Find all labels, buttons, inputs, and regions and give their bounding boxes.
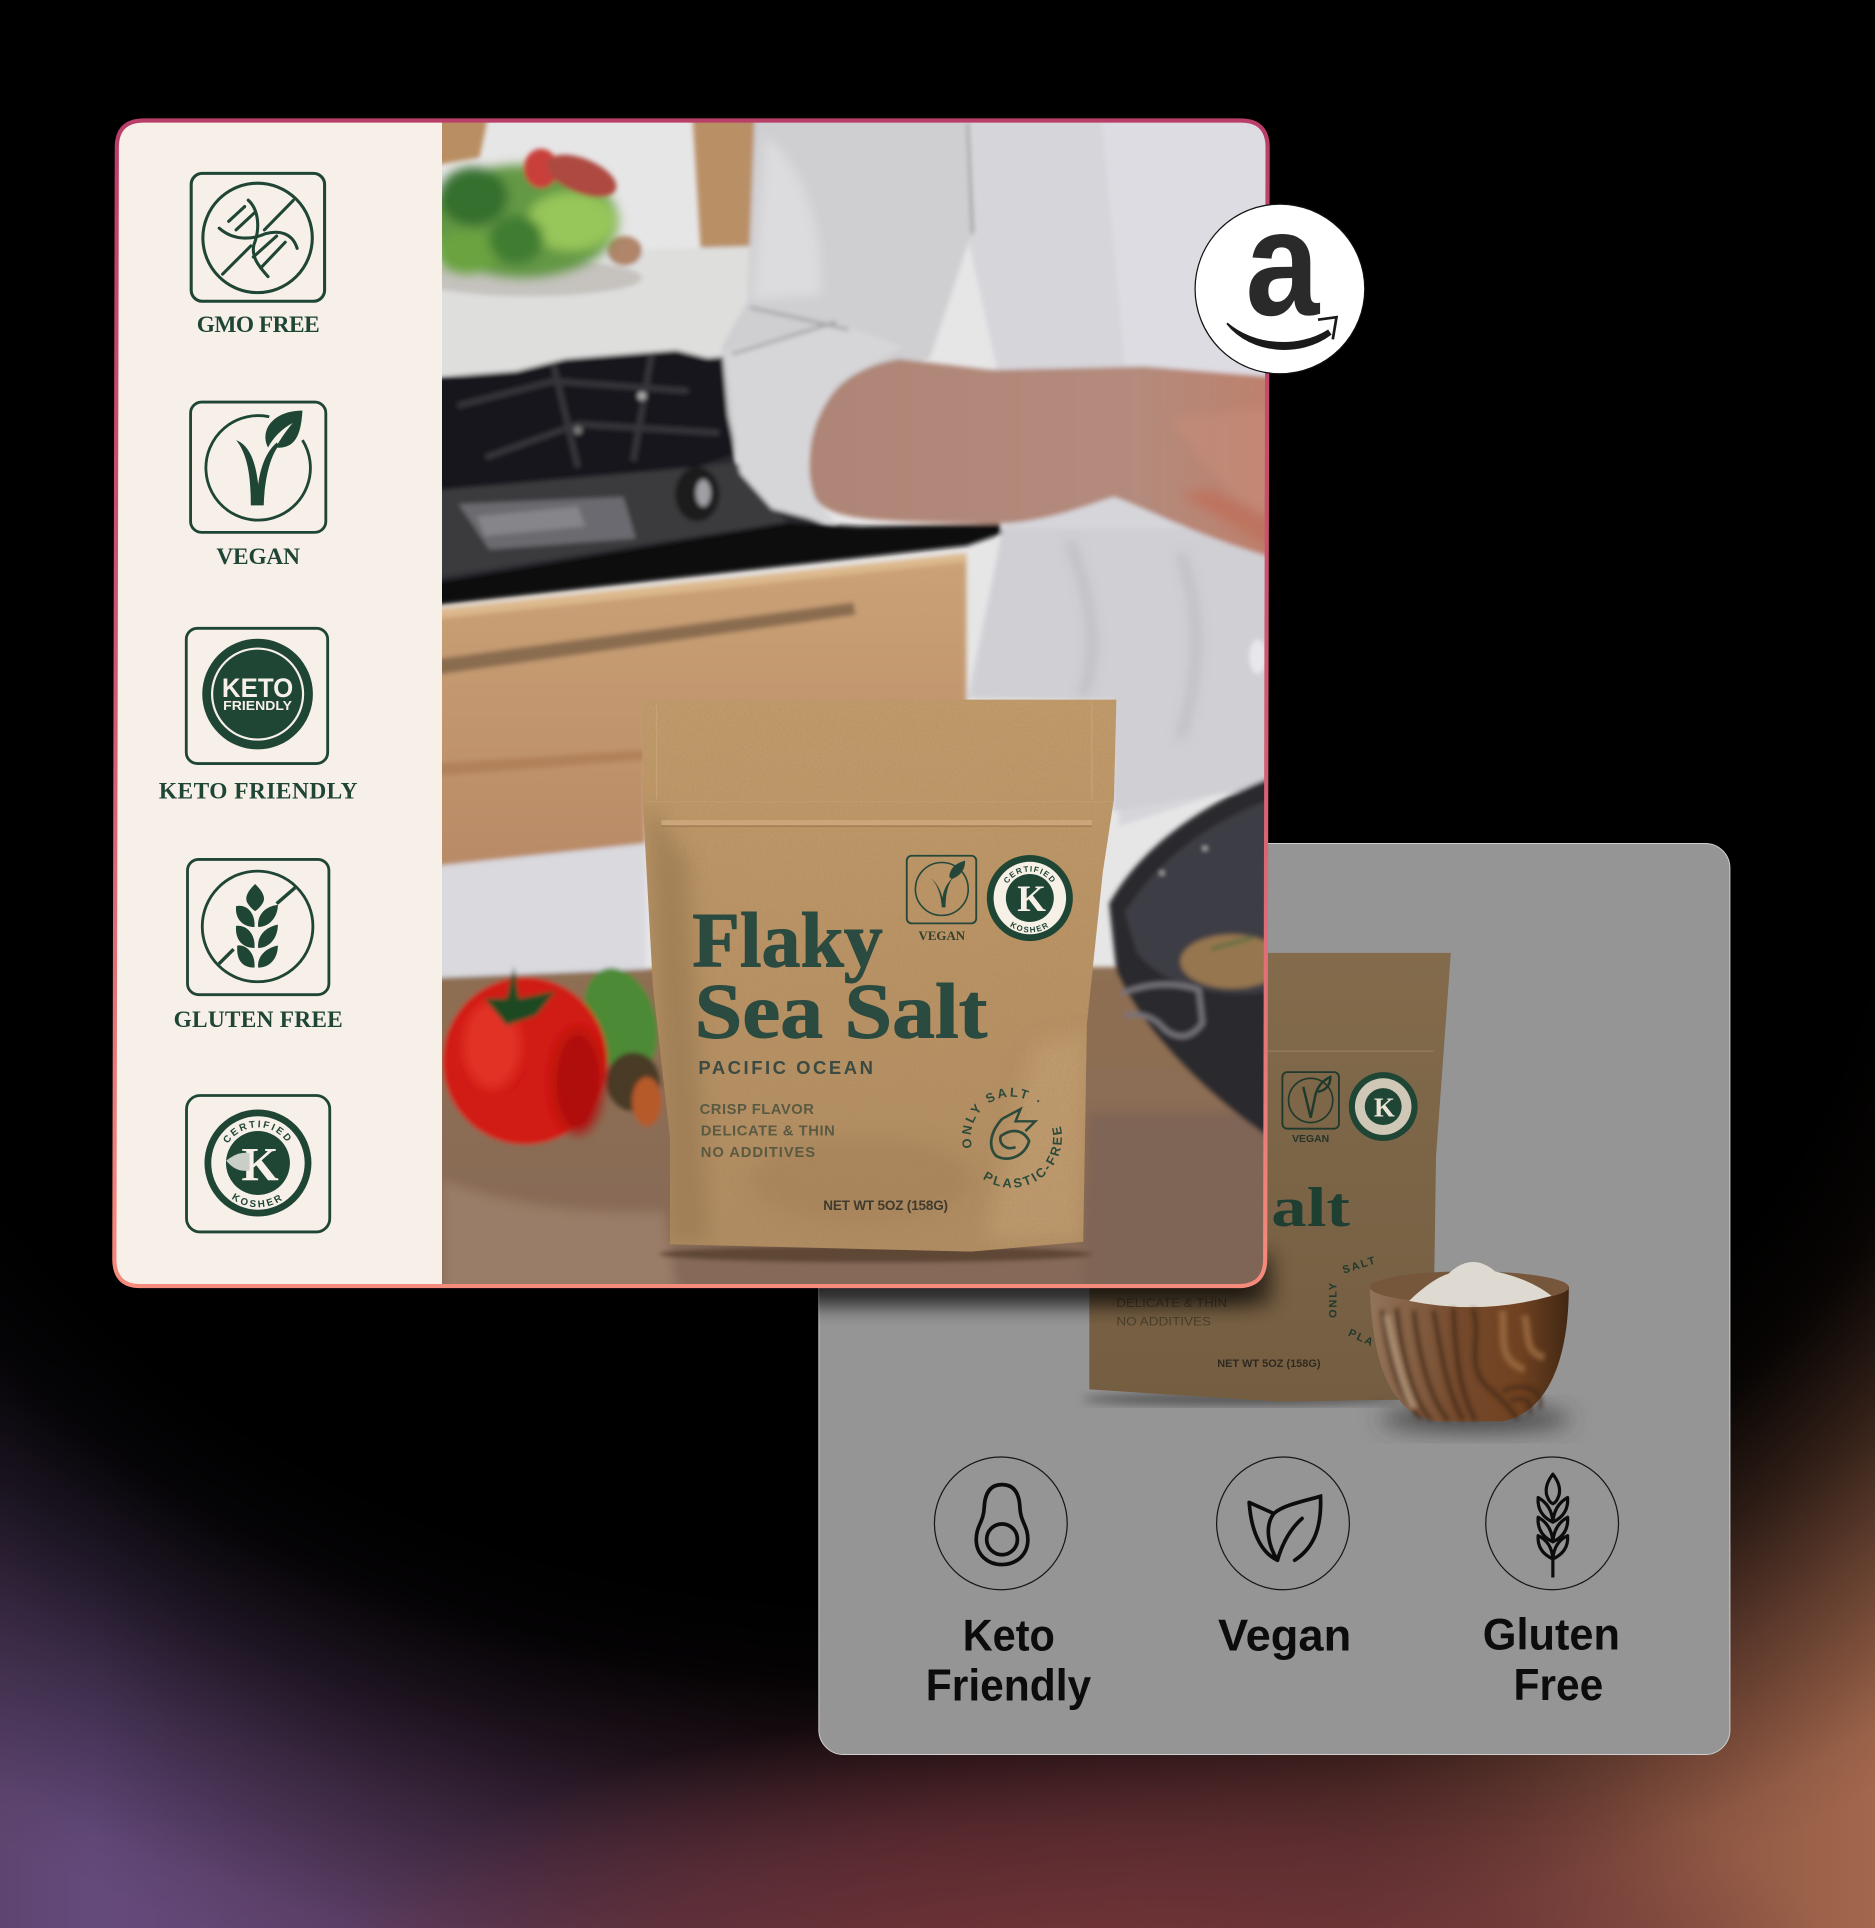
icon: amazon logo (1195, 179, 1365, 374)
icon: keto friendly badge: FRIENDLY (223, 698, 292, 713)
icon: leaf (1217, 1457, 1349, 1590)
tomato and basil (443, 958, 670, 1145)
icon: gluten free badge (188, 859, 329, 995)
back pouch image: DELICATE & THIN (1116, 1296, 1227, 1310)
icon: wheat (1486, 1457, 1619, 1590)
label: vegan: Vegan (1218, 1612, 1351, 1661)
icon: kosher badge: K (241, 1138, 279, 1191)
front pouch (642, 700, 1116, 1252)
wooden table (442, 964, 1242, 1284)
pouch plastic free seal: ONLY SALT · (962, 1088, 1040, 1148)
icon: kosher badge (185, 1094, 332, 1234)
icon: vegan badge (191, 402, 326, 532)
pouch title: Flaky (692, 897, 883, 984)
pouch vegan badge: VEGAN (919, 929, 966, 943)
label: gluten free: GLUTEN FREE (174, 1007, 343, 1033)
label: keto friendly (926, 1612, 1092, 1710)
pouch title second line: Sea Salt (695, 969, 987, 1056)
pouch vegan badge (907, 856, 976, 943)
pouch feature list: NO ADDITIVES (701, 1145, 815, 1161)
label: vegan: VEGAN (216, 544, 300, 570)
panel: back grey product card (787, 843, 1730, 1755)
icon: amazon logo: a (1245, 179, 1321, 347)
label: gmo free: GMO FREE (197, 312, 320, 338)
icon: kosher badge: KOSHER (232, 1193, 282, 1208)
pouch feature list: CRISP FLAVOR (700, 1102, 814, 1118)
pouch plastic free seal (962, 1088, 1062, 1188)
back pouch image: NO ADDITIVES (1116, 1314, 1211, 1328)
label: keto friendly: Keto (963, 1612, 1055, 1661)
pouch kosher badge (986, 855, 1073, 942)
icon: keto friendly badge (186, 628, 328, 764)
pouch feature list (700, 1104, 834, 1157)
front panel drop shadow (123, 1266, 1254, 1303)
stove top (418, 357, 836, 593)
wooden salt bowl (1370, 1262, 1571, 1430)
panel: front lifestyle card (112, 118, 1322, 1288)
back pouch image: PLA (1346, 1327, 1376, 1350)
back pouch image: NET WT 5OZ (158G) (1217, 1358, 1321, 1370)
pouch subtitle: PACIFIC OCEAN (698, 1057, 873, 1078)
counter edge (418, 523, 1002, 607)
pouch kosher badge: CERTIFIED (1004, 866, 1055, 883)
label: gluten free: Free (1514, 1661, 1603, 1710)
icon: keto friendly badge: KETO (222, 673, 293, 703)
pouch feature list: DELICATE & THIN (701, 1123, 835, 1139)
back pouch image: alt (1271, 1177, 1350, 1239)
icon: avocado (934, 1457, 1067, 1590)
cabinet front (418, 556, 966, 868)
label: keto friendly: KETO FRIENDLY (159, 778, 358, 804)
net weight: NET WT 5OZ (158G) (823, 1198, 948, 1213)
label: gluten free (1483, 1610, 1620, 1710)
icon: gmo free badge (191, 173, 325, 301)
pouch plastic free seal: PLASTIC-FREE (983, 1126, 1062, 1188)
icon: kosher badge: CERTIFIED (224, 1120, 291, 1142)
shirt sleeve (722, 111, 971, 523)
back pouch image: K (1374, 1092, 1395, 1122)
back pouch image: VEGAN (1292, 1134, 1329, 1145)
back pouch image (1082, 953, 1451, 1405)
pouch kosher badge: K (1017, 878, 1046, 919)
label: gluten free: Gluten (1483, 1610, 1620, 1659)
forearm (809, 359, 1279, 559)
shirt body (968, 122, 1201, 825)
back pouch image: SALT (1341, 1254, 1378, 1277)
pouch kosher badge: KOSHER (1010, 922, 1048, 933)
label: keto friendly: Friendly (926, 1661, 1092, 1710)
kitchen photo (442, 122, 1266, 1284)
frying pan (1106, 777, 1264, 1136)
back pouch image: ONLY (1327, 1281, 1339, 1318)
white counter (418, 843, 645, 996)
wood boards on wall (442, 122, 490, 168)
salad bowl (416, 146, 642, 296)
front panel cast shadow (787, 1254, 1273, 1303)
